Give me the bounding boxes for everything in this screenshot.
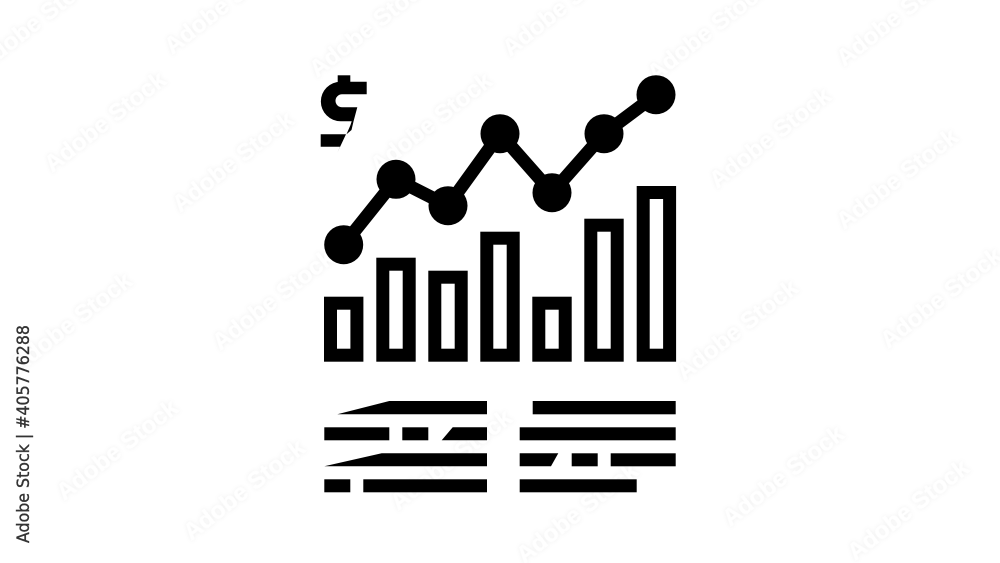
watermarks: Adobe Stock [831,123,964,235]
text block: left lines [324,401,487,492]
watermarks: Adobe Stock [167,106,300,218]
watermarks: Adobe Stock [51,394,184,506]
bar chart [330,192,670,355]
watermarks: Adobe Stock [207,244,340,356]
watermarks: Adobe Stock [5,267,138,379]
line chart [324,75,676,264]
watermarks: Adobe Stock [365,67,498,179]
watermarks: Adobe Stock [717,420,850,532]
watermarks: Adobe Stock [842,454,975,563]
watermarks: Adobe Stock [385,404,518,516]
icon: dollar sign [321,75,367,153]
stock id caption: Adobe Stock | #405776288 [14,325,34,543]
watermarks: Adobe Stock [39,66,172,178]
watermarks: Adobe Stock [704,82,837,194]
watermarks: Adobe Stock [178,434,311,546]
watermarks: Adobe Stock [671,274,804,386]
text block: right lines [520,401,676,492]
